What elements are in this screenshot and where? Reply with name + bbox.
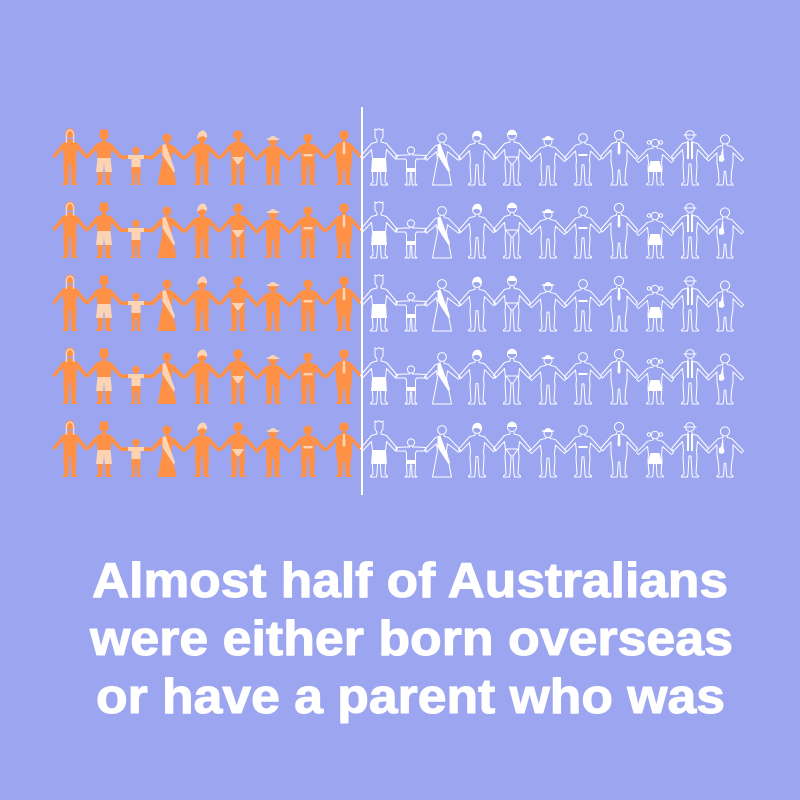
pictogram row 5	[52, 420, 744, 477]
pictogram row 2	[52, 201, 744, 258]
headline	[89, 554, 733, 724]
divider line between orange and white groups	[361, 107, 363, 495]
headline: or have a parent who was	[96, 670, 725, 724]
headline: Almost half of Australians	[92, 554, 728, 608]
headline: were either born overseas	[89, 612, 733, 666]
pictogram row 3	[52, 274, 744, 331]
pictogram row 1	[52, 128, 744, 185]
pictogram row 4	[52, 347, 744, 404]
